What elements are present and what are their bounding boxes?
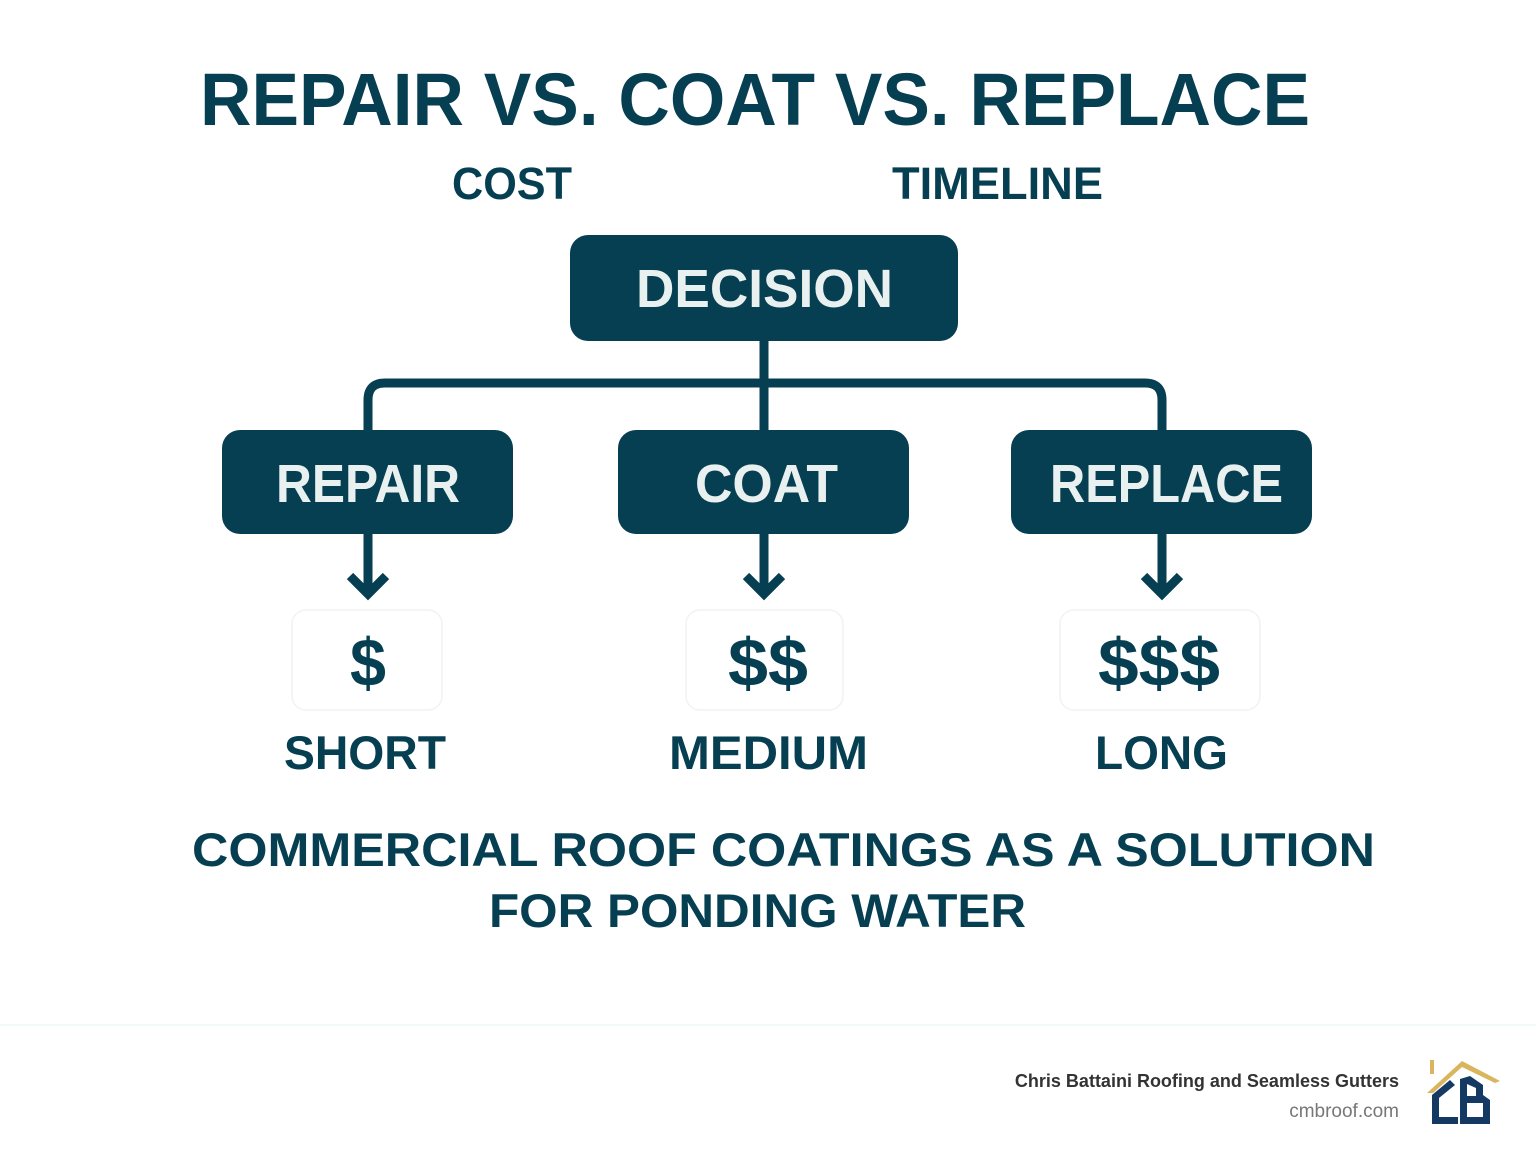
cost: replace: $$$	[1098, 625, 1220, 701]
arrow: coat	[746, 534, 782, 594]
decision box: DECISION	[636, 259, 893, 319]
option: replace	[1011, 430, 1312, 534]
footer: company name: Chris Battaini Roofing and Seamless Gutters	[1015, 1071, 1399, 1091]
timeline: short: SHORT	[284, 726, 446, 779]
subtitle: COMMERCIAL ROOF COATINGS AS A SOLUTION	[192, 823, 1375, 876]
arrow: replace	[1144, 534, 1180, 594]
footer: website: cmbroof.com	[1289, 1101, 1399, 1122]
title: REPAIR VS. COAT VS. REPLACE	[200, 58, 1310, 141]
decision box	[570, 235, 958, 341]
cost: replace	[1060, 610, 1260, 710]
subtitle: FOR PONDING WATER	[489, 884, 1026, 937]
logo	[1427, 1060, 1500, 1124]
option: coat	[618, 430, 909, 534]
cost: coat: $$	[728, 625, 808, 701]
timeline: long: LONG	[1095, 726, 1228, 779]
cost: repair	[292, 610, 442, 710]
option: repair	[222, 430, 513, 534]
heading: timeline: TIMELINE	[892, 158, 1103, 209]
connector lines	[368, 341, 1162, 432]
option: replace: REPLACE	[1050, 454, 1283, 514]
arrow: repair	[350, 534, 386, 594]
cost: coat	[686, 610, 843, 710]
option: coat: COAT	[695, 454, 838, 514]
option: repair: REPAIR	[276, 454, 460, 514]
heading: cost: COST	[452, 158, 572, 209]
timeline: medium: MEDIUM	[669, 726, 868, 779]
cost: repair: $	[350, 625, 386, 701]
subtitle	[192, 823, 1375, 937]
